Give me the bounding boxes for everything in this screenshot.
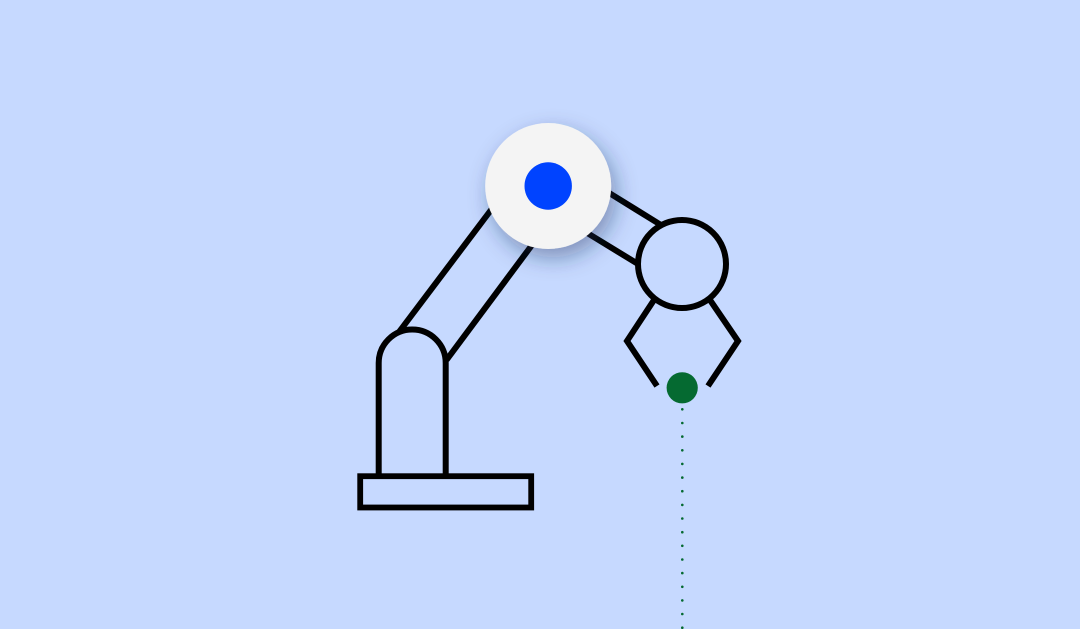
icon: forearm xyxy=(584,191,661,264)
icon: wrist joint xyxy=(638,220,726,308)
icon: gripper xyxy=(627,300,738,386)
icon: shoulder joint xyxy=(485,123,611,249)
dotted guide line xyxy=(681,408,684,629)
icon: upper arm xyxy=(399,206,532,360)
icon: robot lower column xyxy=(379,329,446,474)
icon: green target dot xyxy=(667,372,698,403)
icon: robot base plate xyxy=(360,476,531,508)
